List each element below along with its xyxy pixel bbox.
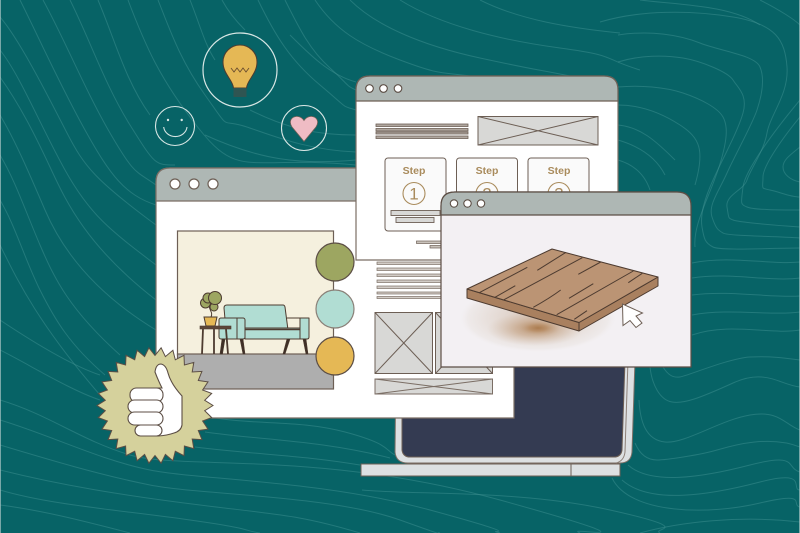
image placeholder banner [478, 116, 598, 145]
window buttons [366, 85, 402, 92]
room illustration [178, 231, 334, 389]
title bar [441, 192, 691, 215]
step 3 card [528, 158, 589, 231]
fingers [128, 388, 163, 436]
image placeholder two [436, 312, 492, 374]
step 1 card [385, 158, 446, 231]
window buttons [170, 179, 218, 189]
room floor [178, 354, 334, 389]
heading lines placeholder [376, 124, 468, 138]
laptop lid [395, 360, 635, 463]
step 3 card: Step [548, 165, 570, 177]
window frame [156, 168, 514, 418]
laptop [361, 360, 635, 476]
step 2 card: Step [476, 165, 498, 177]
title bar [356, 76, 618, 101]
image placeholder wide [375, 379, 492, 394]
icon: heart [282, 106, 326, 150]
step 2 card: 2 [482, 184, 492, 204]
panel: steps browser window [356, 76, 618, 260]
image placeholder one [375, 312, 432, 374]
laptop screen [402, 360, 625, 457]
cursor arrow [622, 304, 642, 328]
step 1 card: 1 [409, 184, 419, 204]
side table with plant [200, 292, 231, 354]
window buttons [450, 200, 485, 207]
wood board [467, 249, 658, 331]
step 1 card: Step [403, 165, 425, 177]
window frame [441, 192, 691, 367]
title bar [156, 168, 514, 201]
thumb hand [150, 364, 182, 436]
sofa [219, 305, 309, 354]
step 2 card [456, 158, 518, 231]
panel: main browser window [156, 168, 514, 418]
laptop screen edge [616, 360, 628, 463]
icon: light bulb [203, 33, 277, 107]
colour swatches [316, 243, 354, 375]
step 3 card: 3 [554, 184, 564, 204]
board shadow [460, 284, 616, 352]
panel: product browser window [441, 192, 691, 367]
icon: smiley face [156, 106, 194, 146]
room wall [178, 231, 334, 355]
icon: thumbs up badge [97, 348, 213, 463]
window frame [356, 76, 618, 260]
text lines placeholder [377, 262, 457, 298]
caption lines placeholder [416, 241, 446, 248]
starburst badge [97, 348, 213, 463]
laptop base [361, 464, 620, 476]
